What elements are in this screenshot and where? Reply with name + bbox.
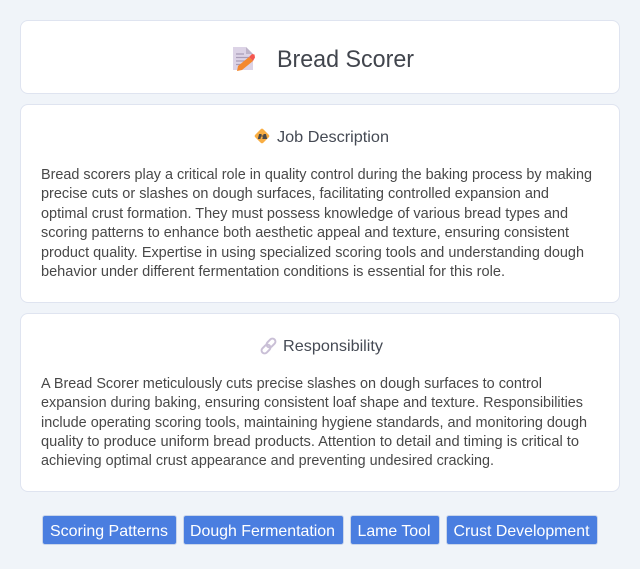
job description text — [41, 167, 592, 280]
job description text: behavior under different fermentation conditions is essential for this role. — [41, 264, 505, 280]
panel: title card — [20, 20, 620, 94]
responsibility text: expansion during baking, ensuring consistent loaf shape and texture. Responsibilities — [41, 395, 583, 411]
job description text: precise cuts or slashes on dough surfaces, facilitating controlled expansion and — [41, 186, 549, 202]
heading: job description: Job Description — [277, 129, 389, 146]
responsibility text: quality to produce uniform bread products. Attention to detail and timing is critical to — [41, 434, 579, 450]
title: Bread Scorer — [277, 46, 414, 73]
panel: responsibility — [20, 313, 620, 492]
tag: Scoring Patterns — [42, 515, 177, 545]
panel: job description — [20, 104, 620, 303]
icon: construction diamond — [254, 128, 270, 144]
tag: Scoring Patterns: Scoring Patterns — [50, 523, 168, 540]
tag: Crust Development — [446, 515, 598, 545]
tag: Lame Tool — [350, 515, 440, 545]
tag: Lame Tool: Lame Tool — [358, 523, 430, 540]
tag: Dough Fermentation: Dough Fermentation — [190, 523, 335, 540]
tag: Crust Development: Crust Development — [454, 523, 590, 540]
icon: link — [260, 337, 277, 355]
job description text: Bread scorers play a critical role in quality control during the baking process by making — [41, 167, 592, 183]
job description text: scoring patterns to enhance both aesthetic appeal and texture, ensuring consistent — [41, 225, 569, 241]
heading: responsibility: Responsibility — [283, 338, 383, 355]
responsibility text: achieving optimal crust appearance and preventing undesired cracking. — [41, 453, 494, 469]
icon: document with pencil — [233, 47, 255, 71]
responsibility text — [41, 376, 587, 469]
job description text: product quality. Expertise in using specialized scoring tools and understanding dough — [41, 245, 584, 261]
responsibility text: A Bread Scorer meticulously cuts precise slashes on dough surfaces to control — [41, 376, 542, 392]
tag: Dough Fermentation — [183, 515, 344, 545]
job description text: optimal crust formation. They must possess knowledge of various bread types and — [41, 206, 568, 222]
responsibility text: include operating scoring tools, maintaining hygiene standards, and monitoring dough — [41, 415, 587, 431]
